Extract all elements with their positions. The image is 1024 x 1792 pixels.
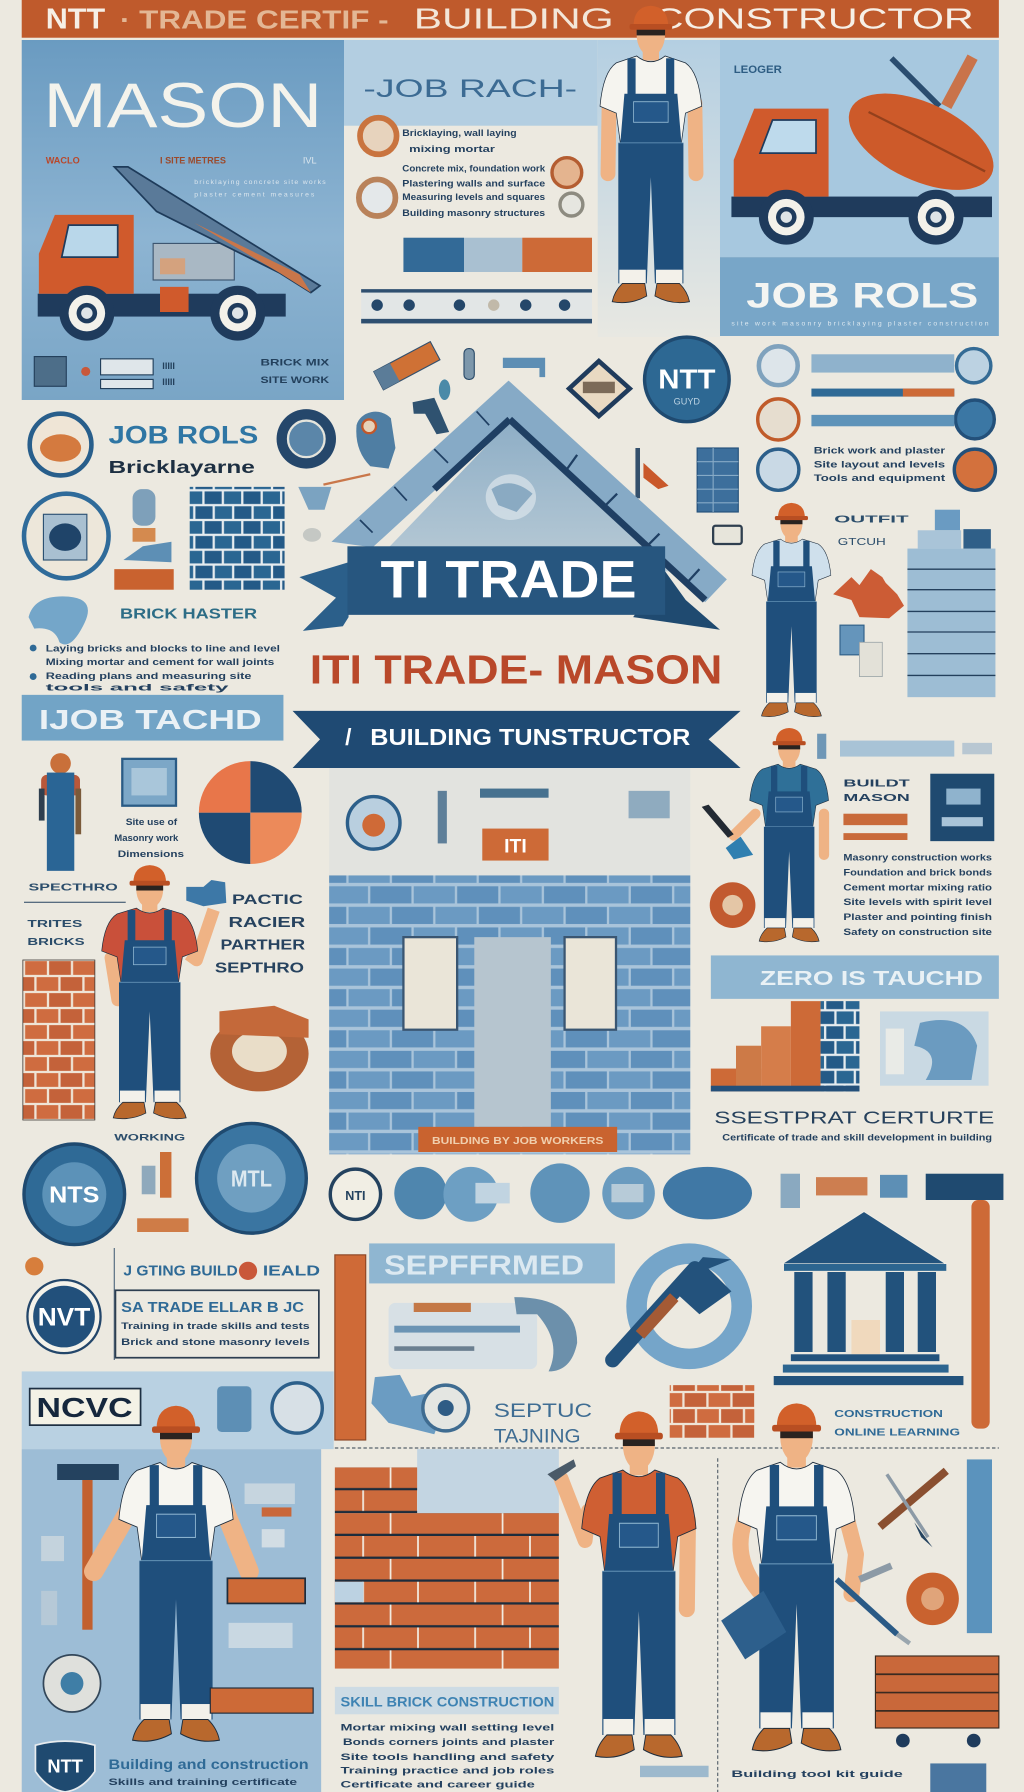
icon: round badge (24, 494, 109, 578)
truck (38, 167, 320, 341)
worker: white shirt, centre right (752, 503, 831, 717)
bullet list: Mixing mortar and cement for wall joints (46, 657, 274, 667)
panel: skill text block: Brick and stone masonry levels (121, 1337, 310, 1347)
orange bars (843, 814, 907, 840)
brick in hand (227, 1578, 305, 1603)
icon: framed panel (122, 759, 176, 806)
small trowel icons: WORKING (114, 1133, 185, 1143)
header banner: · TRADE CERTIF - (120, 5, 389, 35)
panel: job roles truck (720, 40, 1008, 336)
row of round icons (330, 1163, 752, 1223)
hammer (57, 1464, 119, 1630)
bullet list (30, 643, 280, 692)
icon: trowel badge (30, 414, 91, 475)
chart: brick steps (711, 1001, 859, 1091)
panel: right text block: MASON (843, 793, 910, 804)
brick sample bar (403, 238, 592, 272)
panel: job reach list: Plastering walls and surface (402, 178, 545, 188)
caption lines: WACLO (46, 155, 80, 165)
caption: septic training: TAJNING (494, 1425, 581, 1447)
orange sign (418, 1127, 617, 1152)
panel: right text block: Cement mortar mixing ratio (843, 882, 993, 892)
panel: job reach list: Concrete mix, foundation work (402, 163, 546, 173)
caption: under institute (834, 1409, 960, 1438)
panel: skill text block: Training in trade skills and tests (121, 1321, 310, 1331)
text block: bottom middle (335, 1687, 559, 1789)
panel: skill text block (114, 1248, 320, 1360)
worker: blue shirt with trowel (702, 728, 829, 942)
panel: bottom left worker (22, 1406, 321, 1792)
brick on ground (210, 1688, 313, 1713)
pale tool icons left (41, 1536, 64, 1625)
window left (403, 937, 457, 1030)
caption: small text beside pie: Masonry work (114, 833, 179, 843)
ribbon: ITI trade (299, 546, 720, 631)
job roles heading: JOB ROLS (109, 421, 258, 449)
panel: skill text block: SA TRADE ELLAR B JC (121, 1300, 304, 1316)
rule: section dividers (335, 1448, 999, 1792)
caption lines: Building and construction (109, 1757, 309, 1772)
caption lines (109, 1757, 309, 1787)
labels: left of worker: SPECTHRO (29, 882, 118, 893)
ribbon: ITI trade: TI TRADE (381, 551, 637, 610)
caption lines: Skills and training certificate (109, 1777, 297, 1787)
icon: gear (277, 409, 336, 469)
brick wall sample (190, 487, 285, 590)
band: job tached: IJOB TACHD (39, 704, 262, 735)
orange sign: BUILDING BY JOB WORKERS (432, 1136, 604, 1147)
panel: right text block: Site levels with spirit level (843, 897, 992, 907)
job roles label: JOB ROLS (746, 275, 978, 315)
worker: red shirt mid left (102, 865, 226, 1119)
certificate text: Certificate of trade and skill development in building (722, 1133, 992, 1143)
labels: right of worker: SEPTHRO (215, 961, 304, 977)
badge: NVT (27, 1280, 101, 1353)
panel: job roles truck: site work masonry bricklaying plaster construction (731, 321, 989, 328)
shield NTT: NTT (47, 1756, 83, 1777)
illustration: pipe tool (389, 1297, 577, 1371)
door (474, 937, 551, 1127)
badge: MTL (197, 1123, 306, 1233)
header banner: BUILDING (414, 4, 614, 36)
gear and tool accents: GTCUH (838, 537, 886, 548)
panel: job roles left cluster (24, 409, 336, 692)
brick master heading: BRICK HASTER (120, 606, 257, 622)
badge: NTS (24, 1144, 125, 1245)
caption lines: IVL (303, 155, 317, 165)
caption lines: bricklaying concrete site works (194, 179, 326, 186)
icon: grinder tool (371, 1375, 469, 1434)
icon: tool bracket (713, 526, 742, 544)
bullet list: Laying bricks and blocks to line and level (46, 643, 280, 653)
ribbon: building constructor: BUILDING TUNSTRUCTOR (370, 724, 691, 750)
labels: right of worker: RACIER (229, 915, 306, 931)
small trowel icons (114, 1133, 189, 1232)
icon: trowel tools (114, 489, 174, 590)
ruler (335, 1255, 366, 1440)
icon: blue toolbox (721, 1591, 786, 1659)
badge: NTS: NTS (49, 1181, 99, 1207)
icon strip: right middle (817, 734, 992, 759)
emblem: trowel and belt (210, 1006, 309, 1091)
panel: job reach list (359, 118, 583, 218)
labels: left of worker (24, 882, 126, 948)
truck with mixer (731, 57, 1008, 245)
badge: NTT: GUYD (674, 397, 700, 407)
text block: bottom middle: Certificate and career guide (341, 1779, 535, 1789)
small legend icons: SITE WORK (261, 375, 330, 385)
text block: bottom middle: Mortar mixing wall setting level (341, 1722, 554, 1732)
worker: white shirt bottom right (738, 1403, 856, 1751)
band: zero tached (711, 955, 999, 999)
text block: bottom middle: Training practice and job roles (341, 1766, 554, 1776)
text block: bottom middle: SKILL BRICK CONSTRUCTION (341, 1694, 554, 1709)
caption: small text beside pie: Dimensions (118, 849, 184, 859)
panel: right text block: Foundation and brick bonds (843, 867, 992, 877)
labels: right of worker: PACTIC (232, 892, 303, 907)
panel: right text block: Masonry construction works (843, 853, 992, 863)
caption: under institute: CONSTRUCTION (834, 1409, 943, 1420)
worker: red shirt bottom (547, 1411, 696, 1757)
header banner: CONSTRUCTOR (654, 4, 974, 36)
caption: septic training: SEPTUC (494, 1400, 592, 1422)
panel: building heading area: ITI (504, 836, 527, 858)
caption: small text beside pie: Site use of (126, 817, 178, 827)
badge: NTT: NTT (658, 364, 716, 395)
panel: worker column background (598, 40, 720, 337)
caption: septic training (494, 1400, 592, 1447)
icon: wrench ring (613, 1254, 742, 1360)
row of round icons: NTI (345, 1189, 366, 1203)
panel: right text block: Plaster and pointing finish (843, 912, 993, 922)
icon: hand (29, 596, 88, 645)
brick wall bottom (335, 1449, 559, 1669)
window right (565, 937, 616, 1030)
brick column (23, 960, 95, 1120)
mason title: MASON (43, 71, 322, 141)
ribbon: building constructor (293, 711, 741, 768)
panel: job reach list: Bricklaying, wall laying (402, 128, 517, 138)
tools: bottom right (837, 1459, 992, 1643)
panel: skill text block: IEALD (263, 1263, 320, 1279)
level rail (361, 289, 592, 323)
icon: diamond badge (569, 361, 630, 416)
gear and tool accents (833, 514, 910, 677)
caption: under institute: ONLINE LEARNING (834, 1427, 960, 1438)
icon: circle (43, 1655, 101, 1712)
badge: MTL: MTL (231, 1165, 272, 1191)
worker: white shirt (94, 1406, 249, 1741)
icon cluster: right of badge: Brick work and plaster (814, 446, 946, 456)
band: septfrmed: SEPFFRMED (384, 1249, 584, 1280)
small legend icons: IIIII (162, 377, 175, 387)
pale tool icons right (229, 1483, 295, 1648)
worker: top centre (600, 6, 702, 303)
band: job tached (22, 695, 283, 741)
caption lines: I SITE METRES (160, 155, 226, 165)
text block: bottom middle: Bonds corners joints and plaster (343, 1737, 555, 1747)
panel: right text block (843, 774, 994, 937)
bullet list: tools and safety (46, 682, 231, 692)
loose tools row (298, 342, 669, 542)
badge: NTT (645, 337, 729, 422)
panel: job roles truck: LEOGER (734, 64, 782, 76)
small legend icons: IIIII (162, 361, 175, 371)
panel: right text block: BUILDT (843, 778, 911, 789)
navy badge (930, 774, 994, 841)
image panel: site photo (880, 1011, 989, 1086)
icon cluster: right of badge (758, 346, 995, 490)
caption lines: plaster cement measures (194, 192, 315, 199)
labels: left of worker: BRICKS (27, 937, 85, 948)
icon: hammer (926, 1174, 1003, 1429)
icon cluster: right of badge: Site layout and levels (814, 459, 945, 469)
chart: quadrant pie (199, 761, 302, 864)
ribbon: building constructor: / (345, 724, 352, 750)
panel: building heading area (329, 768, 690, 875)
small legend icons: BRICK MIX (261, 358, 329, 368)
labels: right of worker: PARTHER (221, 938, 305, 954)
badge: NVT: NVT (38, 1304, 91, 1332)
band: zero tached: ZERO IS TAUCHD (760, 967, 983, 990)
shield NTT (35, 1741, 95, 1792)
gear and tool accents: OUTFIT (834, 514, 910, 525)
icon: ornament and chips (25, 1174, 907, 1275)
labels: left of worker: TRITES (27, 919, 82, 930)
band: NCVC (22, 1371, 334, 1449)
certificate text: SSESTPRAT CERTURTE (714, 1107, 994, 1127)
caption: small text beside pie (114, 817, 184, 859)
labels: right of worker (215, 892, 306, 977)
footer caption (640, 1763, 986, 1792)
panel: job reach list: Measuring levels and squares (402, 192, 545, 202)
panel: mason truck (22, 40, 344, 400)
brick cart (875, 1656, 999, 1747)
brick pallet (907, 510, 995, 697)
text block: bottom middle: Site tools handling and safety (341, 1752, 556, 1762)
title: ITI trade mason: ITI TRADE- MASON (310, 646, 722, 692)
panel: right text block: Safety on construction site (843, 927, 992, 937)
figure: small left (39, 753, 81, 871)
icon: orange round (710, 882, 755, 928)
caption lines (46, 155, 326, 199)
footer caption: Building tool kit guide (731, 1769, 903, 1779)
panel: job reach list: Building masonry structures (402, 208, 545, 218)
icon cluster: right of badge: Tools and equipment (814, 473, 945, 483)
band: septfrmed (369, 1243, 615, 1283)
bricklayer subtitle: Bricklayarne (109, 457, 255, 477)
panel: job reach heading (344, 40, 598, 126)
small brick sample (670, 1385, 754, 1438)
brick building wall (329, 875, 690, 1154)
data table icon (697, 448, 738, 512)
institute building (774, 1211, 963, 1385)
small legend icons (34, 357, 330, 389)
panel: job reach list: mixing mortar (409, 144, 495, 154)
certificate text (714, 1107, 994, 1143)
header banner (22, 0, 999, 38)
roof illustration (331, 381, 727, 602)
header banner: NTT (46, 4, 106, 36)
bullet list: Reading plans and measuring site (46, 671, 251, 681)
band: NCVC: NCVC (37, 1392, 133, 1423)
panel: job reach heading: -JOB RACH- (363, 75, 577, 103)
panel: skill text block: J GTING BUILD (123, 1263, 238, 1279)
